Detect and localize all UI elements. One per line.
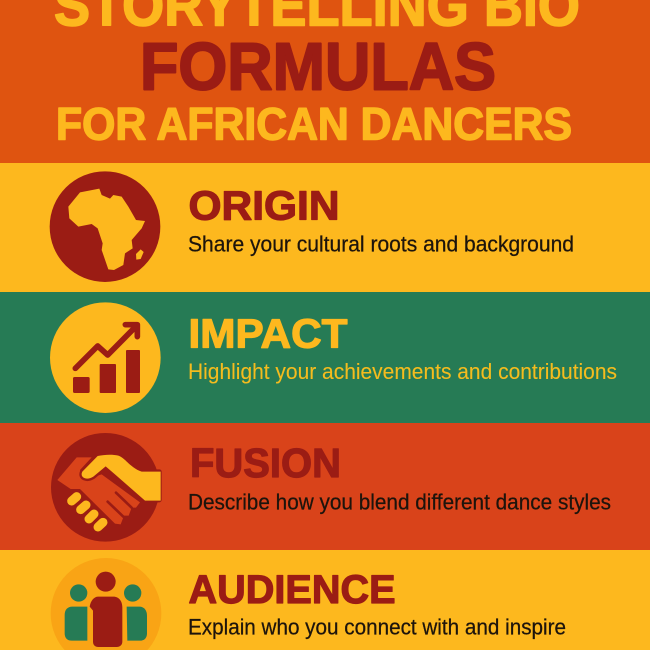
icon: three people in circle — [51, 558, 161, 650]
icon: africa map in circle — [50, 171, 160, 282]
icon: rising bar chart in circle — [50, 302, 161, 413]
title line: Formulas: FORMULAS — [140, 30, 496, 104]
panel: audience — [0, 550, 650, 650]
heading: fusion: FUSION — [190, 440, 341, 486]
icon: handshake in circle — [51, 433, 161, 542]
heading: audience: AUDIENCE — [188, 568, 396, 612]
text: origin description: Share your cultural roots and background — [188, 232, 574, 257]
panel: title header — [0, 0, 650, 163]
title line: For African Dancers: FOR AFRICAN DANCERS — [56, 98, 572, 149]
heading: impact: IMPACT — [188, 310, 348, 356]
text: audience description: Explain who you connect with and inspire — [188, 614, 566, 639]
text: fusion description: Describe how you blend different dance styles — [188, 489, 611, 514]
panel: origin — [0, 163, 650, 292]
heading: origin: ORIGIN — [188, 182, 340, 228]
text: impact description: Highlight your achievements and contributions — [188, 359, 617, 384]
panel: fusion — [0, 423, 650, 550]
panel: impact — [0, 292, 650, 423]
